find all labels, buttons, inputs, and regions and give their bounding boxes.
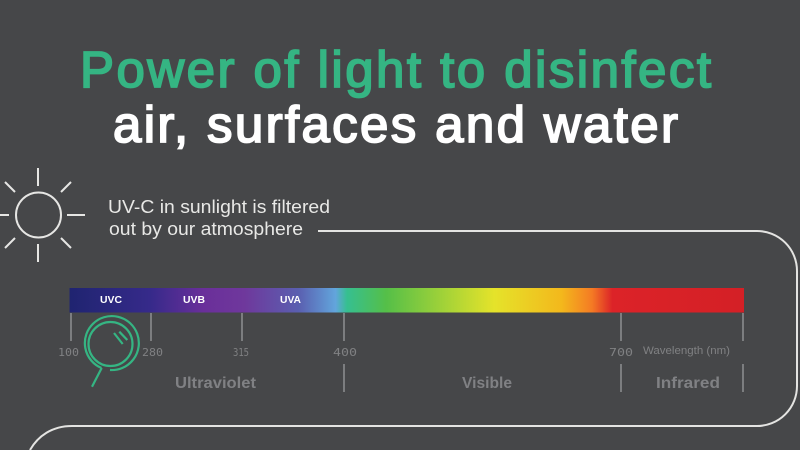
- wavelength numbers: 400: [333, 347, 357, 359]
- band labels: [100, 295, 301, 306]
- band labels: UVB: [183, 295, 205, 306]
- region labels: Infrared: [656, 375, 720, 392]
- atmosphere note: UV-C in sunlight is filtered: [108, 197, 330, 217]
- title line 1: Power of light to disinfect: [80, 41, 711, 98]
- wavelength numbers: 280: [142, 347, 163, 359]
- atmosphere note: out by our atmosphere: [109, 219, 303, 239]
- region labels: Ultraviolet: [175, 375, 256, 392]
- band labels: UVC: [100, 295, 122, 306]
- wavelength ticks: [71, 313, 743, 392]
- icon: magnifier: [85, 316, 139, 387]
- icon: sun: [0, 168, 85, 262]
- connector frame line: [30, 231, 797, 450]
- band labels: UVA: [280, 295, 301, 306]
- wavelength unit label: Wavelength (nm): [643, 345, 730, 357]
- region labels: Visible: [462, 375, 512, 392]
- wavelength numbers: 700: [609, 347, 633, 359]
- wavelength numbers: 315: [233, 347, 249, 359]
- title line 2: air, surfaces and water: [113, 96, 678, 153]
- wavelength numbers: [58, 347, 633, 359]
- spectrum bar: [70, 288, 744, 312]
- atmosphere note: [108, 197, 330, 239]
- region labels: [175, 375, 720, 392]
- wavelength numbers: 100: [58, 347, 79, 359]
